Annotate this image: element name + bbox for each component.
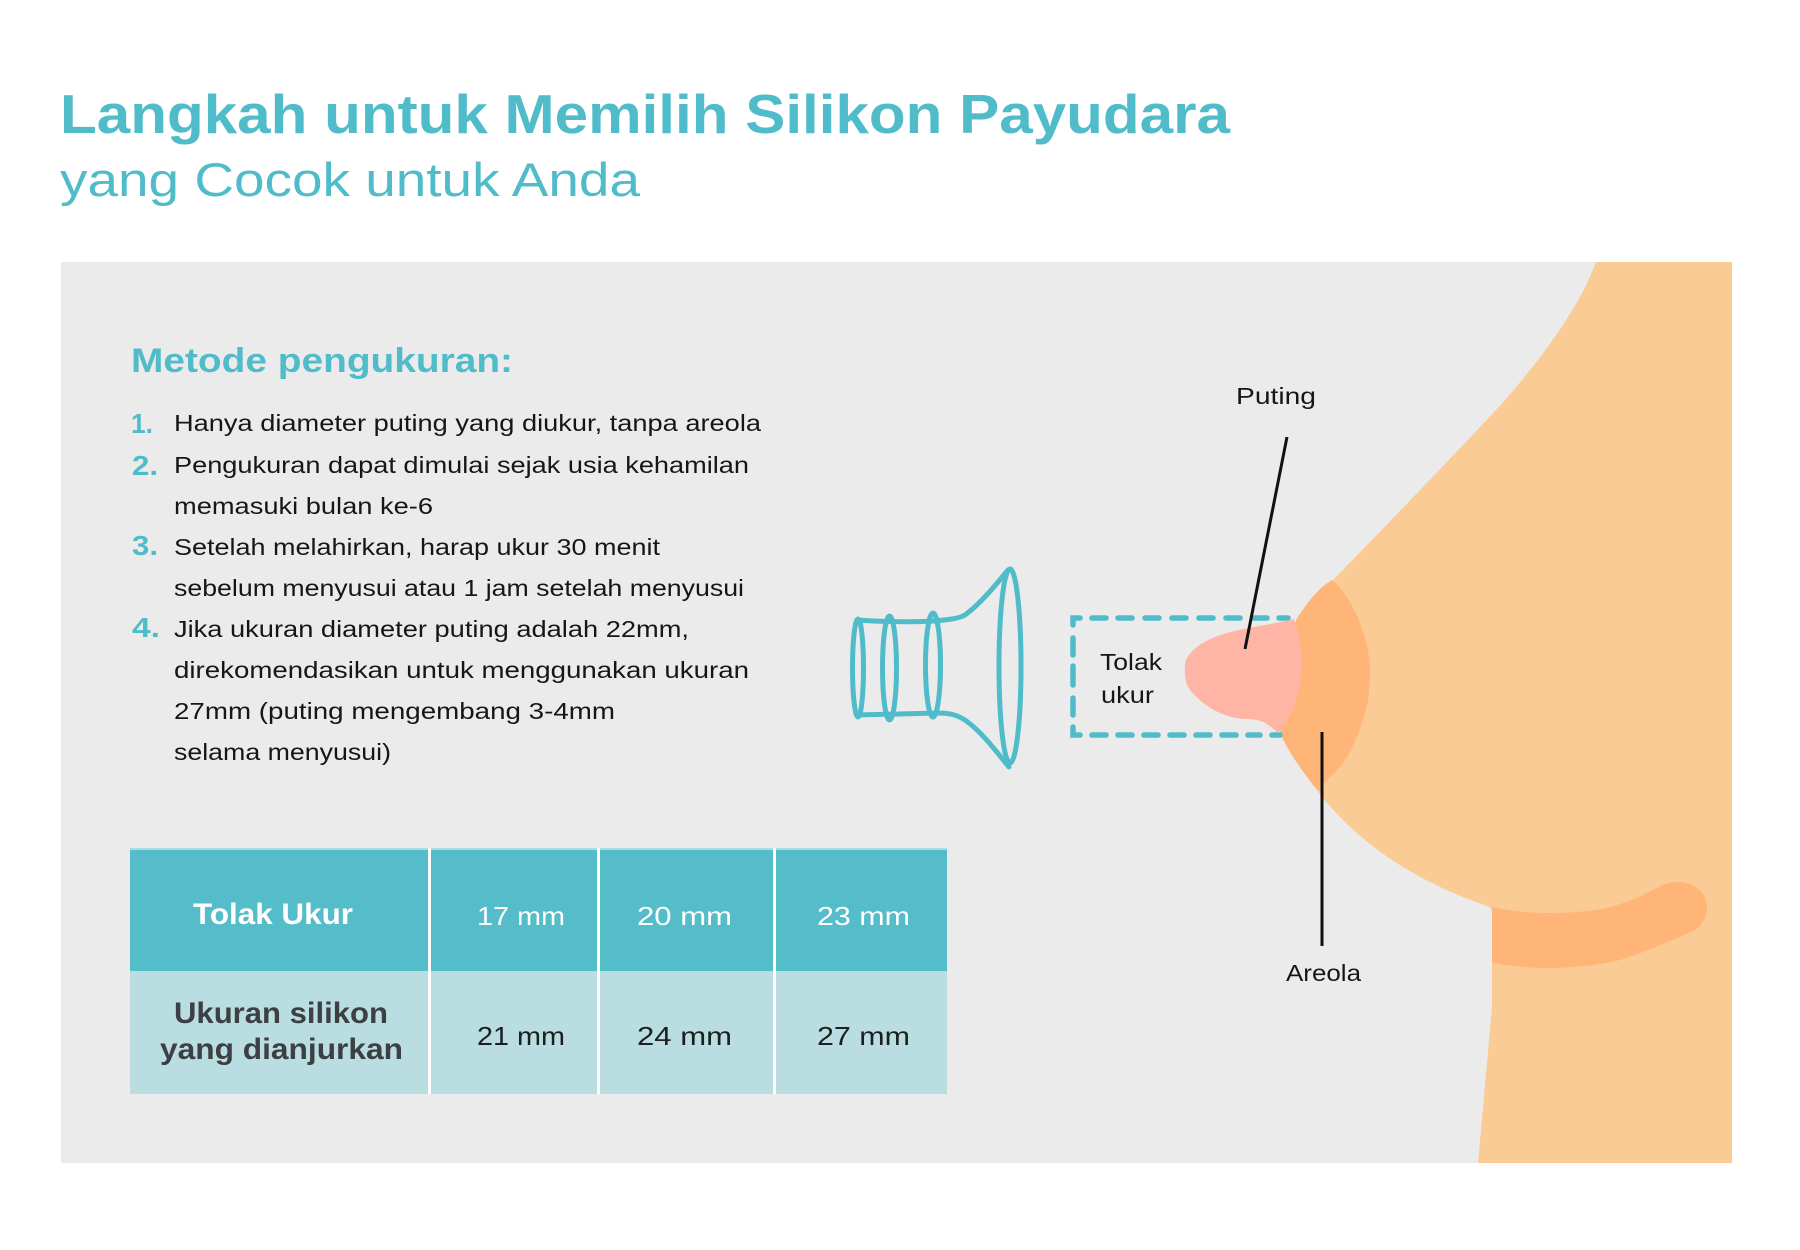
table header row: 20 mm	[637, 901, 732, 931]
numbered list: 4.	[132, 612, 160, 643]
size table	[130, 848, 947, 1094]
heading: measurement method: Metode pengukuran:	[131, 342, 513, 380]
label: measure: ukur	[1101, 682, 1154, 708]
label: nipple with leader line	[1236, 383, 1316, 649]
arm fold	[1492, 882, 1707, 968]
numbered list: Jika ukuran diameter puting adalah 22mm,	[174, 616, 689, 642]
numbered list: selama menyusui)	[174, 739, 391, 765]
body: torso and breast	[1300, 262, 1732, 1163]
label: areola with leader line: Areola	[1286, 960, 1361, 986]
numbered list: Pengukuran dapat dimulai sejak usia kehamilan	[174, 452, 749, 478]
title: yang Cocok untuk Anda	[60, 153, 641, 206]
label: measure	[1100, 649, 1163, 708]
table header row: 23 mm	[817, 901, 910, 931]
table header row	[193, 898, 910, 931]
numbered list: direkomendasikan untuk menggunakan ukuran	[174, 657, 749, 683]
title	[60, 83, 1230, 206]
table recommended size row	[160, 997, 910, 1066]
numbered list: 2.	[132, 450, 158, 481]
icon: breast shield funnel	[852, 569, 1021, 767]
numbered list: 1.	[131, 408, 153, 439]
label: measure: Tolak	[1100, 649, 1163, 675]
areola	[1280, 580, 1370, 791]
table recommended size row: 21 mm	[477, 1021, 565, 1051]
numbered list: Setelah melahirkan, harap ukur 30 menit	[174, 534, 661, 560]
table header row: 17 mm	[477, 901, 565, 931]
numbered list: 27mm (puting mengembang 3-4mm	[174, 698, 615, 724]
table recommended size row: Ukuran silikon	[174, 997, 388, 1030]
measure box dashed	[1073, 618, 1288, 735]
label: nipple with leader line: Puting	[1236, 383, 1316, 409]
numbered list	[131, 408, 761, 765]
table header row: Tolak Ukur	[193, 898, 353, 931]
table recommended size row: yang dianjurkan	[160, 1033, 403, 1066]
numbered list: sebelum menyusui atau 1 jam setelah menyusui	[174, 575, 744, 601]
numbered list: 3.	[132, 530, 158, 561]
nipple	[1185, 619, 1301, 733]
table recommended size row: 24 mm	[637, 1021, 732, 1051]
panel: grey background	[61, 262, 1732, 1163]
title: Langkah untuk Memilih Silikon Payudara	[60, 83, 1230, 145]
table recommended size row: 27 mm	[817, 1021, 910, 1051]
numbered list: memasuki bulan ke-6	[174, 493, 433, 519]
numbered list: Hanya diameter puting yang diukur, tanpa areola	[174, 410, 761, 436]
